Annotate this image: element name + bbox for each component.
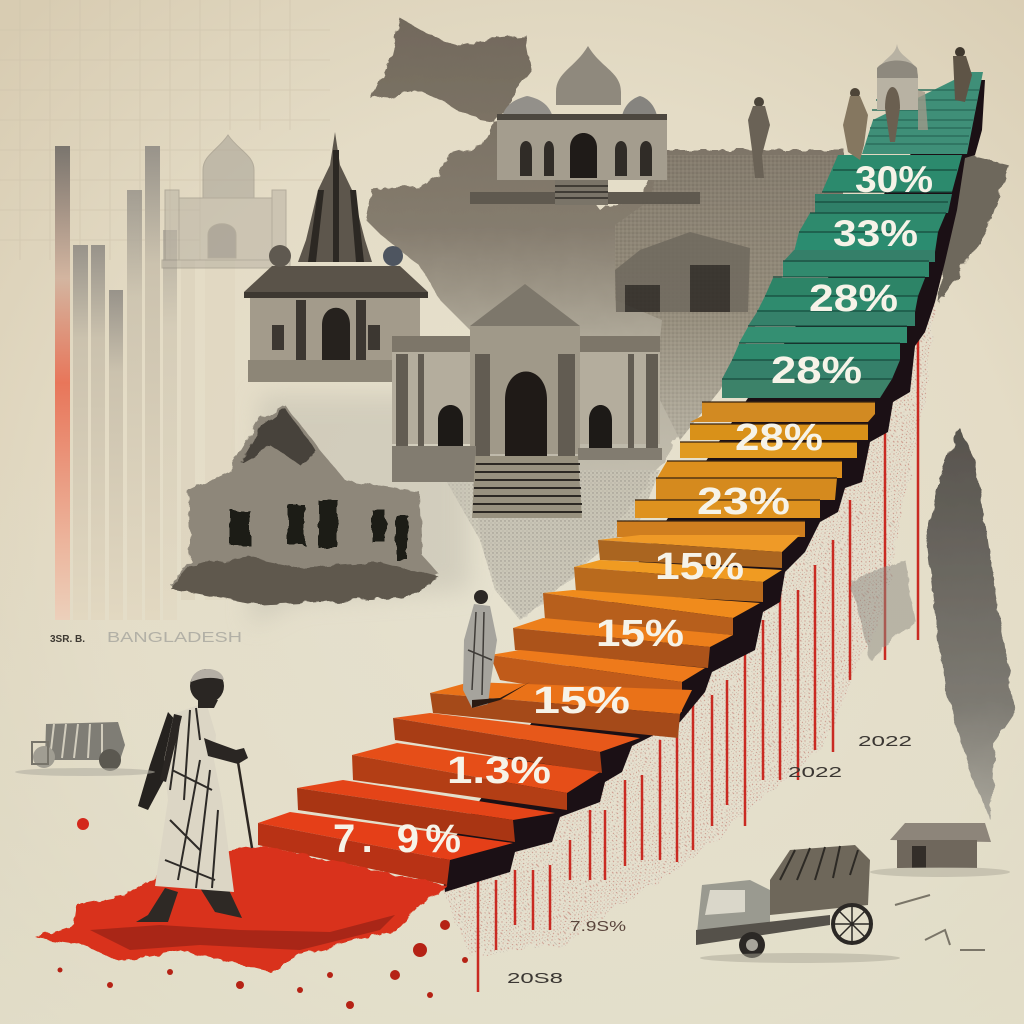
icon: distant hut [870,823,1010,877]
percent labels on the steps: 1.3% [447,750,551,792]
red pigment splash on the ground [36,818,468,1009]
faded Bangladesh caption: 3SR. B. [50,634,85,645]
faded Bangladesh caption [50,629,242,646]
percent labels on the steps: 28% [771,350,862,392]
staircase shadow side [440,80,985,892]
year and value annotations [507,733,912,987]
map fragment: east of the stairs [938,154,1010,302]
percent labels on the steps: 30% [855,159,933,200]
percent labels on the steps: 15% [533,680,630,722]
small figure on the stairs [463,590,530,708]
percent labels on the steps [333,159,933,861]
map fragment: right shard [926,428,1014,820]
debris near truck [895,895,985,950]
percent labels on the steps: 28% [809,278,898,320]
bar chart: fading bars at left [55,146,235,620]
percent labels on the steps: 15% [596,613,684,655]
icon: shanty shed [615,232,750,312]
icon: Hindu temple [244,132,428,382]
percent labels on the steps: 15% [655,546,744,588]
staircase: green top steps [722,72,983,398]
percent labels on the steps: 7. 9% [333,817,461,861]
year and value annotations: 20S8 [507,970,563,987]
faded Bangladesh caption: BANGLADESH [107,629,242,646]
percent labels on the steps: 23% [697,481,790,523]
map silhouette: central region [366,18,845,618]
icon: colonial palace [392,284,662,518]
staircase: red bottom steps [258,713,640,885]
icon: faint domed monument at top left [162,135,290,268]
staircase: orange lower steps [430,590,760,738]
percent labels on the steps: 28% [735,417,823,459]
percent labels on the steps: 33% [833,213,918,254]
icon: truck with covered load [696,845,900,963]
year and value annotations: 2022 [858,733,912,750]
icon: ruined house [170,405,440,605]
map silhouette: stippled south plain [250,155,842,625]
icon: covered cart at left [15,722,155,776]
walking man with cane [136,669,252,922]
icon: domed mosque at top [470,46,700,205]
top figures on the stairs and the distant dome [748,44,972,178]
year and value annotations: 2022 [788,764,842,781]
year and value annotations: 7.9S% [570,918,626,935]
faint background grid [0,0,330,260]
drips below the stairs [440,200,945,992]
staircase: amber middle steps [574,402,875,602]
dotted wash under the staircase [440,200,945,955]
